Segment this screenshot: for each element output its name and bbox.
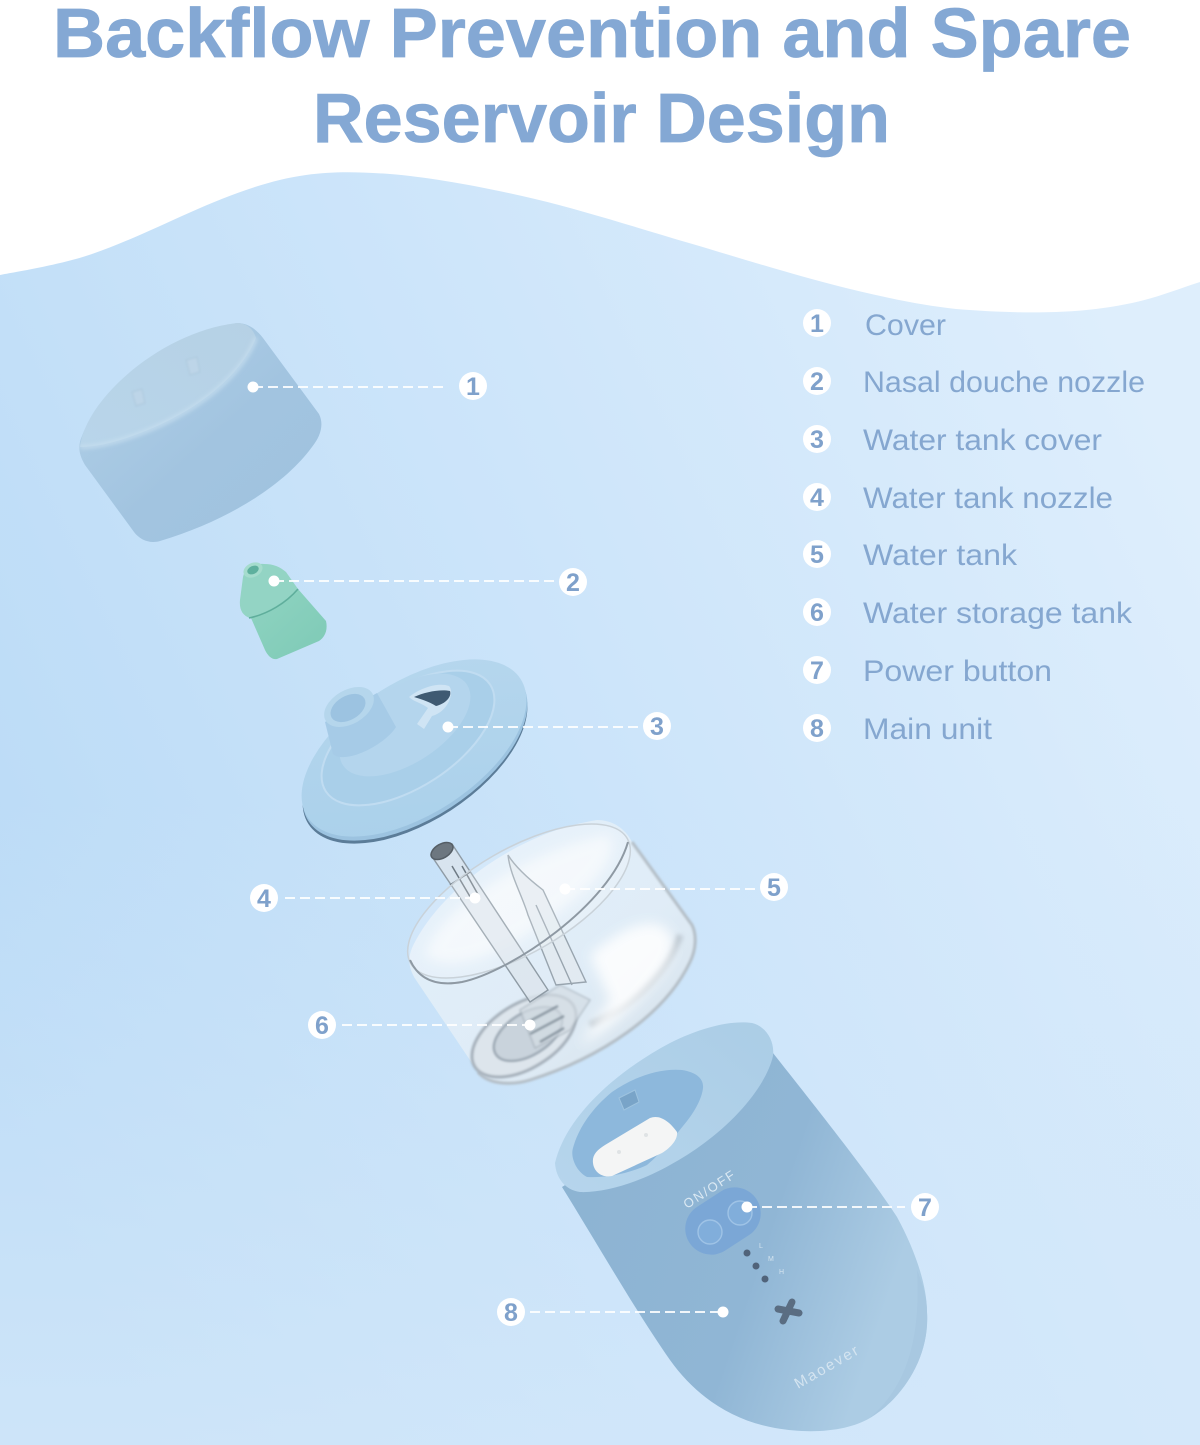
power button: ON/OFF (680, 1167, 737, 1212)
callout numbers: 7 (918, 1194, 932, 1222)
indicator lights: H (779, 1269, 784, 1276)
callout numbers (250, 372, 939, 1327)
callout numbers: 8 (504, 1299, 518, 1327)
title (53, 0, 1131, 157)
callout dots (248, 382, 752, 1318)
title: Reservoir Design (313, 79, 890, 157)
legend: parts list: 7 (810, 657, 824, 685)
legend: parts list: Water tank nozzle (863, 482, 1113, 515)
callout numbers: 3 (650, 713, 664, 741)
legend: parts list: 8 (810, 715, 824, 743)
legend: parts list: Main unit (863, 713, 993, 746)
legend: parts list: 1 (810, 310, 824, 338)
legend: parts list: Nasal douche nozzle (863, 366, 1145, 399)
legend: parts list: Water tank cover (863, 424, 1102, 457)
indicator lights: M (768, 1256, 774, 1263)
part 2: nasal douche nozzle (240, 559, 327, 659)
callout lines (253, 387, 905, 1312)
callout numbers: 2 (566, 569, 580, 597)
legend: parts list: 5 (810, 541, 824, 569)
callout numbers: 4 (257, 885, 271, 913)
legend: parts list: Water tank (863, 539, 1018, 572)
power button (675, 1167, 771, 1265)
brand name: Maoever (792, 1342, 861, 1392)
legend: parts list: Water storage tank (863, 597, 1133, 630)
legend: parts list (803, 309, 1145, 746)
legend: parts list: 4 (810, 484, 824, 512)
legend: parts list: 2 (810, 368, 824, 396)
part 3: water tank cover (272, 623, 557, 880)
part 4-6: transparent water tank (385, 793, 695, 1094)
callout numbers: 1 (466, 373, 480, 401)
legend: parts list: 3 (810, 426, 824, 454)
cross icon (778, 1302, 799, 1321)
indicator lights (744, 1243, 784, 1282)
legend: parts list: Power button (863, 655, 1052, 688)
legend: parts list: Cover (865, 309, 946, 342)
callout numbers: 6 (315, 1012, 329, 1040)
legend: parts list: 6 (810, 599, 824, 627)
callout numbers: 5 (767, 874, 781, 902)
indicator lights: L (759, 1243, 763, 1250)
part 7-8: main unit (555, 1022, 927, 1431)
part 1: cover (79, 323, 321, 542)
